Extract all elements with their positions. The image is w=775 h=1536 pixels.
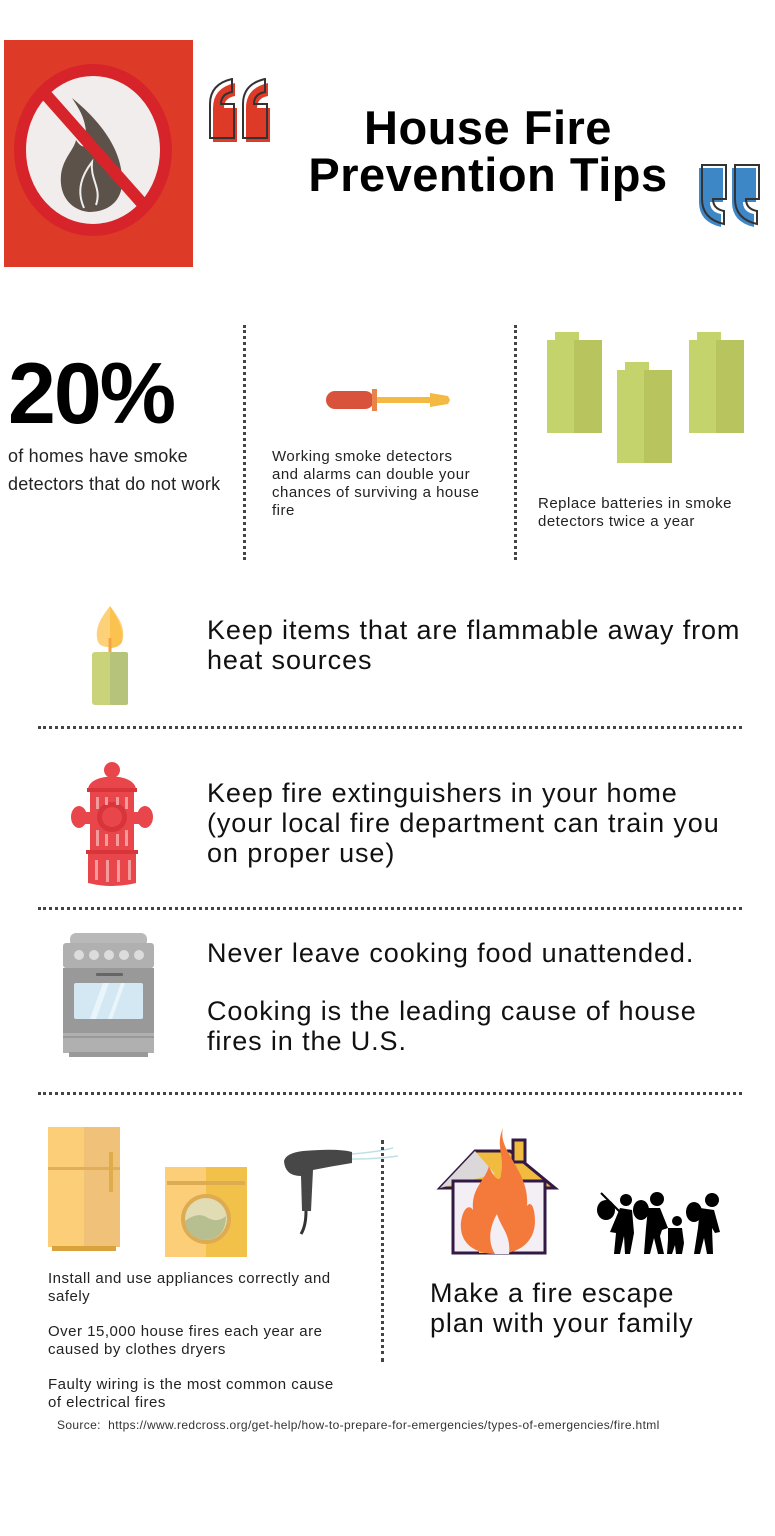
title — [308, 101, 668, 201]
text: appliances: Over 15,000 house fires each year are — [48, 1323, 322, 1340]
icon: stove — [63, 933, 154, 1057]
icon: no fire sign — [4, 40, 193, 267]
text: appliances: Install and use appliances correctly and — [48, 1270, 331, 1287]
text: smoke detectors: Working smoke detectors — [272, 448, 452, 465]
stat: 20%: detectors that do not work — [8, 474, 220, 494]
text: batteries: Replace batteries in smoke — [538, 495, 732, 512]
icon: opening quote — [209, 78, 270, 142]
text: smoke detectors: chances of surviving a house — [272, 484, 479, 501]
text: escape plan: Make a fire escape — [430, 1278, 674, 1308]
text: appliances: Faulty wiring is the most common cause — [48, 1376, 334, 1393]
source: Source: https://www.redcross.org/get-help/how-to-prepare-for-emergencies/types-of-emergencies/fire.html — [57, 1418, 660, 1432]
text: batteries: detectors twice a year — [538, 513, 695, 530]
text: cooking — [207, 938, 697, 1056]
icon: candle — [92, 606, 128, 705]
icon: fire hydrant — [71, 762, 153, 886]
stat: 20%: of homes have smoke — [8, 446, 188, 466]
text: extinguishers — [207, 778, 720, 868]
icon: closing quote — [699, 164, 760, 227]
text: flammable: heat sources — [207, 645, 372, 675]
text: flammable — [207, 615, 740, 675]
stat: 20% — [8, 346, 220, 494]
title: House Fire — [364, 101, 612, 154]
icon: screwdriver — [326, 389, 450, 411]
text: cooking: Never leave cooking food unattended. — [207, 938, 694, 968]
stat: 20%: 20% — [8, 346, 174, 442]
text: smoke detectors: and alarms can double your — [272, 466, 470, 483]
text: smoke detectors: fire — [272, 502, 295, 519]
icon: family escaping — [597, 1192, 720, 1254]
text: batteries — [538, 495, 732, 530]
text: appliances: of electrical fires — [48, 1394, 166, 1411]
text: smoke detectors — [272, 448, 479, 519]
icon: appliances — [48, 1127, 398, 1257]
text: extinguishers: on proper use) — [207, 838, 395, 868]
text: appliances — [48, 1270, 334, 1411]
text: escape plan: plan with your family — [430, 1308, 694, 1338]
text: extinguishers: (your local fire department can train you — [207, 808, 720, 838]
icon: batteries — [547, 332, 744, 463]
text: flammable: Keep items that are flammable away from — [207, 615, 740, 645]
text: escape plan — [430, 1278, 694, 1338]
text: cooking: fires in the U.S. — [207, 1026, 407, 1056]
text: cooking: Cooking is the leading cause of house — [207, 996, 697, 1026]
icon: burning house — [436, 1128, 560, 1254]
text: appliances: caused by clothes dryers — [48, 1341, 226, 1358]
text: appliances: safely — [48, 1288, 90, 1305]
text: extinguishers: Keep fire extinguishers in your home — [207, 778, 678, 808]
title: Prevention Tips — [308, 148, 668, 201]
